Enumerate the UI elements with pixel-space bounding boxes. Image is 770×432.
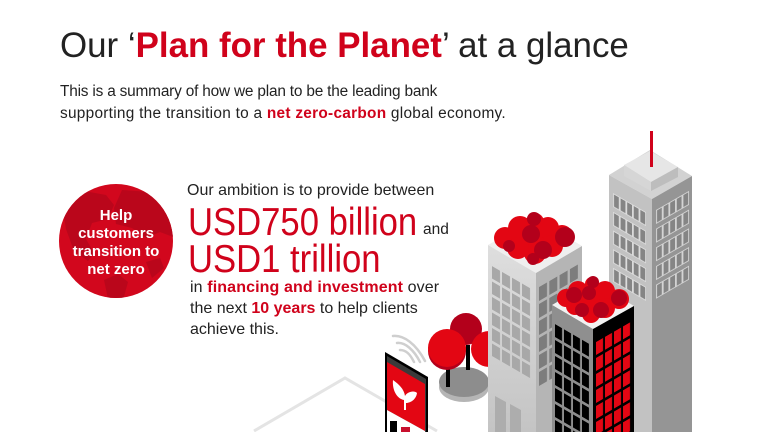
ambition details (190, 279, 439, 338)
badge label (72, 207, 159, 278)
phone with leaf app (385, 336, 428, 432)
wifi signal arcs (393, 336, 425, 362)
doors (495, 396, 521, 432)
black windows (555, 324, 589, 432)
windows left face (492, 266, 532, 381)
building: tall tower (609, 131, 692, 432)
ambition details: achieve this. (190, 321, 279, 338)
headline amount 1: USD750 billion (188, 201, 417, 244)
badge: red globe circle (59, 184, 173, 298)
badge label: net zero (87, 261, 145, 278)
red roof foliage (557, 276, 629, 323)
ambition details: in financing and investment over (190, 279, 439, 296)
red roof foliage (494, 212, 575, 265)
building: black with red windows (552, 276, 634, 432)
and: and (423, 221, 449, 238)
intro text: supporting the transition to a net zero-carbon global economy. (60, 105, 506, 122)
ambition lead-in: Our ambition is to provide between (187, 182, 434, 199)
leaf icon (393, 380, 417, 410)
antenna (650, 131, 653, 167)
badge label: customers (78, 225, 154, 242)
intro text: This is a summary of how we plan to be the leading bank (60, 83, 437, 100)
red windows (596, 322, 631, 432)
windows right face (539, 264, 578, 387)
title: Our ‘Plan for the Planet’ at a glance (60, 26, 629, 65)
headline amount 2: USD1 trillion (188, 238, 381, 281)
trees on round base (428, 313, 507, 402)
outline: house (254, 378, 437, 431)
building: light grey with red roof (488, 212, 582, 432)
ambition details: the next 10 years to help clients (190, 300, 418, 317)
badge label: Help (100, 207, 132, 224)
tower windows, right face (656, 191, 689, 299)
tower windows, left face (613, 193, 646, 301)
badge label: transition to (73, 243, 159, 260)
illustration: city, phone and badge (59, 131, 692, 432)
intro text (60, 83, 506, 122)
